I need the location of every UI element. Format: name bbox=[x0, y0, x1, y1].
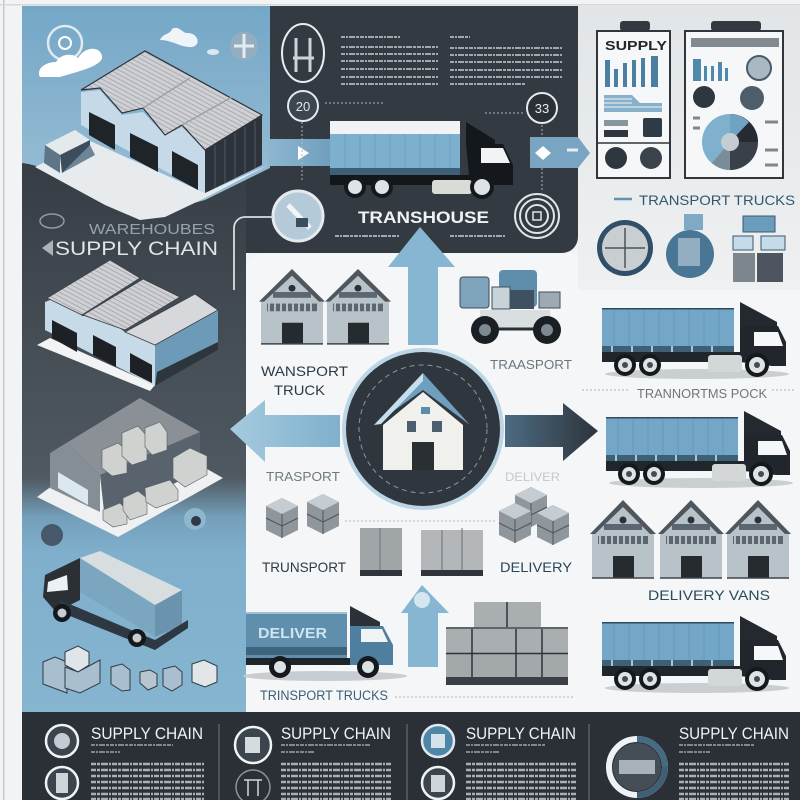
label: WANSPORT TRUCK: TRUCK bbox=[274, 382, 326, 398]
truck: dark panel bbox=[330, 121, 513, 199]
text lines bbox=[466, 745, 576, 799]
footer column 1 bbox=[46, 724, 204, 799]
label: DELIVERY: DELIVERY bbox=[500, 559, 573, 575]
connector line bbox=[234, 217, 273, 290]
crates bbox=[102, 422, 207, 527]
arrow: up top bbox=[388, 227, 455, 345]
clipboard: dashboard bbox=[685, 21, 783, 178]
icon: round badge bbox=[693, 86, 715, 108]
label: WANSPORT TRUCK bbox=[261, 363, 348, 398]
label: TRANSPORT TRUCKS bottom: TRINSPORT TRUCKS bbox=[260, 688, 388, 703]
icon: dark panel round badge: 20 bbox=[296, 99, 310, 114]
icon bbox=[422, 725, 454, 757]
panel: top dark block bbox=[246, 6, 578, 253]
icon bbox=[422, 767, 454, 799]
icon: small cargo truck bbox=[44, 130, 95, 173]
label: WANSPORT TRUCK: WANSPORT bbox=[261, 363, 348, 379]
text block: dark panel left bbox=[341, 37, 438, 84]
text lines bbox=[281, 745, 391, 799]
pie chart bbox=[702, 114, 758, 170]
icon: dark panel counter badge: 33 bbox=[535, 101, 549, 116]
truck: right bottom bbox=[602, 616, 789, 693]
heading: TRANSHOUSE: TRANSHOUSE bbox=[358, 208, 489, 227]
label: TRANSPORT faint: TRANNORTMS POCK bbox=[637, 386, 767, 401]
icon bbox=[46, 767, 78, 799]
label: DELIVER faint: DELIVER bbox=[505, 470, 560, 484]
icon: clock dial bbox=[747, 56, 771, 80]
icon: globe badge bbox=[230, 32, 258, 60]
icons: parcels row bbox=[43, 646, 217, 693]
icon bbox=[236, 770, 270, 800]
truck: right top bbox=[602, 302, 789, 379]
heading: SUPPLY CHAIN: SUPPLY CHAIN bbox=[55, 239, 218, 260]
icon bbox=[235, 727, 271, 763]
icon: cargo containers bbox=[360, 528, 483, 576]
warehouse: with crates bbox=[37, 398, 223, 537]
warehouses: right trio bbox=[590, 500, 791, 578]
panel: center white canvas bbox=[246, 254, 800, 712]
arrow: right bbox=[505, 403, 598, 461]
truck: isometric bbox=[43, 551, 188, 650]
label: DELIVER: DELIVER bbox=[258, 625, 327, 642]
icon: dark panel emblem bbox=[282, 24, 324, 82]
icon: round seal right bbox=[640, 147, 662, 169]
clipboard: supply bbox=[597, 21, 670, 178]
label: TRANSPORT left: TRASPORT bbox=[266, 469, 340, 484]
icon: lens badge bbox=[273, 191, 323, 241]
bar chart: dashboard bbox=[693, 59, 728, 81]
icon: containers on wheels bbox=[460, 270, 561, 344]
heading: TRANSPORT TRUCKS: TRANSPORT TRUCKS bbox=[639, 192, 795, 208]
heading: SUPPLY: SUPPLY bbox=[605, 38, 667, 53]
arrow: left bbox=[230, 400, 340, 462]
connector: right blue arrow tab bbox=[530, 137, 590, 168]
heading: SUPPLY CHAIN bbox=[281, 724, 391, 743]
panel: sky blue block bbox=[22, 6, 270, 215]
icon: cubes left bbox=[266, 494, 339, 538]
icon: target bbox=[515, 194, 559, 238]
donut chart bbox=[609, 739, 665, 795]
warehouses: center pair bbox=[259, 269, 391, 344]
icon: screens bbox=[733, 216, 785, 282]
icon: emblem bbox=[40, 214, 64, 228]
text lines bbox=[679, 745, 789, 799]
panel: left column background bbox=[22, 140, 246, 712]
footer column 2 bbox=[235, 724, 391, 800]
legend chips bbox=[604, 118, 662, 137]
warehouse: mid left row bbox=[37, 260, 218, 391]
label: TRANSPORT right: TRAASPORT bbox=[490, 357, 572, 372]
icon: dark panel round badge bbox=[288, 91, 318, 121]
panel: footer bbox=[22, 712, 800, 800]
footer column 4 bbox=[609, 724, 789, 799]
icon: building in sphere bbox=[666, 214, 714, 278]
label: TRANSPORT lower: TRUNSPORT bbox=[262, 559, 346, 575]
label: DELIVERY VANS: DELIVERY VANS bbox=[648, 587, 770, 603]
icon: sun and cloud bbox=[39, 26, 102, 77]
footer column 3 bbox=[422, 724, 576, 799]
icon: cubes right bbox=[499, 487, 569, 545]
icon: dark clock badge bbox=[41, 524, 63, 546]
heading: SUPPLY CHAIN bbox=[91, 724, 203, 743]
heading: SUPPLY CHAIN bbox=[679, 724, 789, 743]
icon: round seal left bbox=[605, 147, 627, 169]
truck: right middle bbox=[606, 411, 793, 488]
icon: round badge bbox=[740, 86, 764, 110]
bar chart: supply bbox=[605, 56, 658, 87]
icon: small cloud bbox=[160, 28, 219, 55]
heading: SUPPLY CHAIN bbox=[466, 724, 576, 743]
icon bbox=[46, 725, 78, 757]
text lines bbox=[91, 745, 204, 799]
icon: stacked containers bbox=[446, 602, 568, 685]
connector: left blue arrow tab bbox=[268, 139, 330, 166]
heading: WAREHOUSES: WAREHOUBES bbox=[89, 221, 215, 238]
warehouse: large isometric bbox=[35, 51, 268, 220]
icon: dark panel counter badge bbox=[527, 93, 557, 123]
arrow: up bottom bbox=[401, 585, 449, 667]
truck: DELIVER van bbox=[243, 606, 407, 681]
icon: globe badge bbox=[184, 508, 206, 530]
area chart: supply bbox=[604, 95, 662, 112]
center badge: warehouse bbox=[342, 348, 504, 510]
icon: gauge bbox=[597, 220, 653, 276]
panel: right header area bbox=[578, 6, 800, 290]
text block: dark panel right bbox=[450, 37, 562, 84]
